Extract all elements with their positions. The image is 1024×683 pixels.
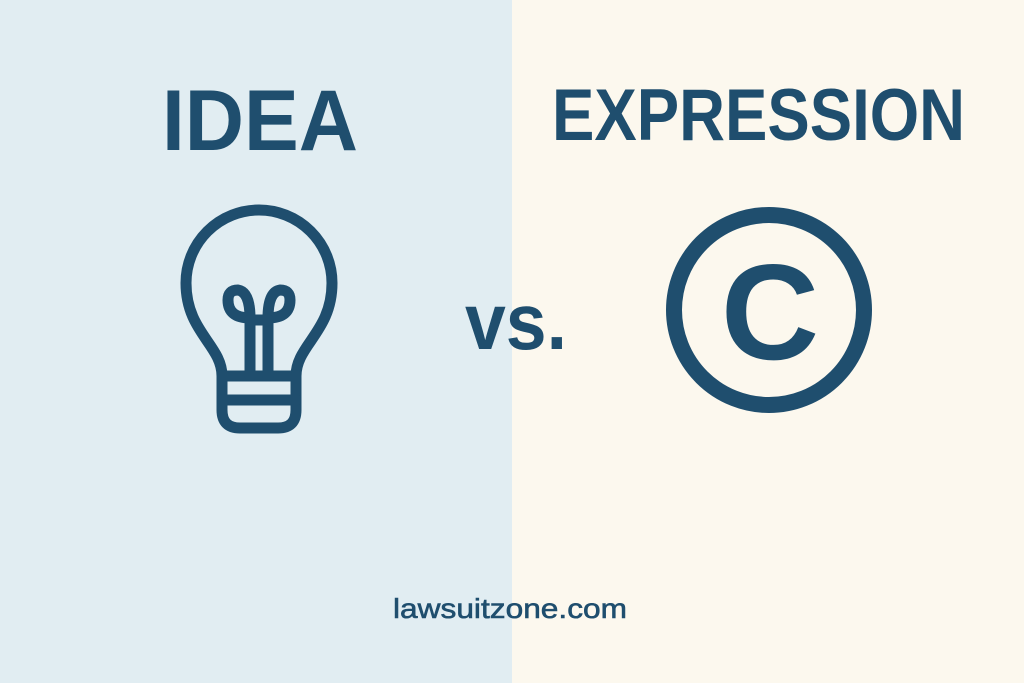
text: vs.: vs. bbox=[465, 277, 567, 366]
title: IDEA: IDEA bbox=[162, 73, 358, 169]
icon: copyright symbol bbox=[674, 215, 864, 405]
title: EXPRESSION: EXPRESSION bbox=[552, 75, 965, 156]
icon: copyright symbol: C bbox=[721, 236, 819, 388]
icon: light bulb bbox=[186, 210, 332, 428]
footer: website: lawsuitzone.com bbox=[393, 593, 627, 624]
